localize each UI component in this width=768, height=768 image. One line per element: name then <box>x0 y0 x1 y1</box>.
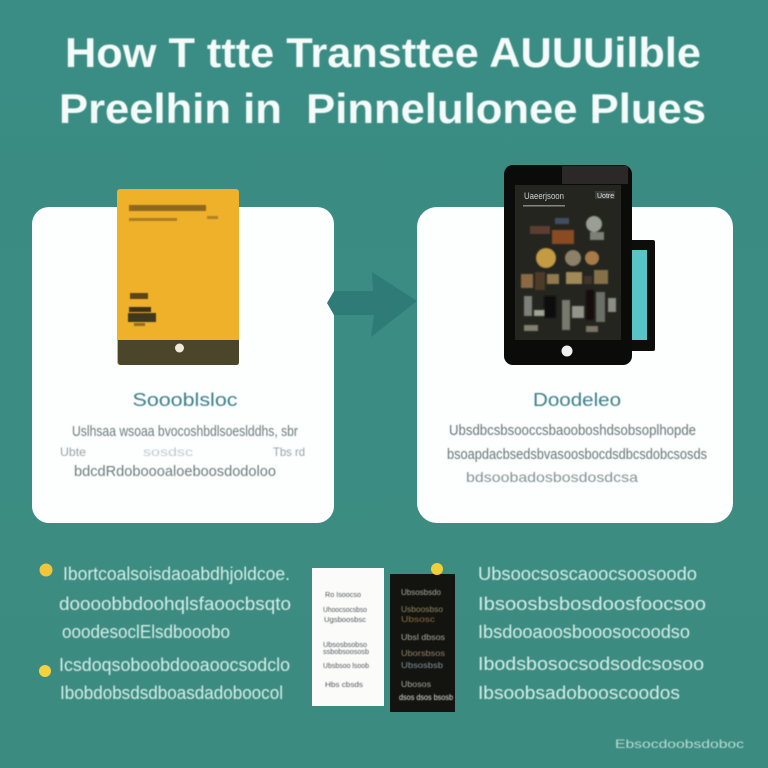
title: Preelhin in Pinnelulonee Plues <box>59 85 706 132</box>
left card body text: bdcdRdoboooaloeboosdodoloo <box>74 463 276 480</box>
icon: back device <box>628 240 655 351</box>
right bullet text <box>478 564 706 703</box>
left card heading: Soooblsloc <box>132 390 238 410</box>
icon: tablet <box>504 165 632 365</box>
right bullet text: Ibsoobsadobooscoodos <box>478 683 680 703</box>
bullets: left column <box>39 564 291 703</box>
icon: bullet three <box>431 563 443 575</box>
panel: dark e-reader: Ubosos <box>401 680 431 689</box>
left card body text: sosdsc <box>143 445 193 459</box>
right bullet text: Ibsdooaoosbooosocoodso <box>478 622 690 642</box>
right card body text: bdsoobadosbosdosdcsa <box>466 469 638 485</box>
panel: paper document: ssbobsoososb <box>323 649 369 656</box>
tablet screen artwork <box>521 216 616 332</box>
icon: tablet: Uotre <box>597 193 614 200</box>
panel: paper document: Ubsosbsobso <box>323 642 367 649</box>
panel: paper document <box>312 568 384 706</box>
right bullet text: Ibsoosbsbosdoosfoocsoo <box>478 594 706 614</box>
right bullet text: Ibodsbosocsodsodcsosoo <box>478 654 704 674</box>
panel: paper document: Ugsboosbsc <box>324 617 367 624</box>
left bullet text: doooobbdoohqlsfaoocbsqto <box>59 594 291 614</box>
panel: dark e-reader: Ubsosc <box>401 615 435 624</box>
panel: dark e-reader: Ubsl dbsos <box>401 633 445 642</box>
panel: paper document: Ro Isoocso <box>325 592 361 599</box>
footer credit: Ebsocdoobsdoboc <box>615 737 744 751</box>
panel: dark e-reader: Usboosbso <box>401 605 444 614</box>
left bullet text: Ibortcoalsoisdaoabdhjoldcoe. <box>63 564 290 584</box>
panel: paper document: Hbs cbsds <box>325 682 364 689</box>
right card body text: bsoapdacbsedsbvasoosbocdsdbcsdobcsosds <box>447 446 707 463</box>
icon: bullet one <box>40 564 52 576</box>
icon: tablet: Uaeerjsoon <box>524 191 564 201</box>
panel: paper document: Ubsbsoo lsoob <box>323 663 369 670</box>
panel: dark e-reader: Uborsbsos <box>401 649 445 658</box>
left card body text <box>60 423 305 480</box>
icon: bullet two <box>39 665 51 677</box>
left bullet text: ooodesoclElsdbooobo <box>62 622 230 642</box>
left bullet text <box>59 564 291 703</box>
arrow <box>327 272 417 337</box>
right card body text <box>447 422 707 485</box>
panel: paper document: Uhoocsocsbso <box>323 607 367 614</box>
left card body text: Ubte <box>60 445 86 459</box>
right card body text: Ubsdbcsbsooccsbaooboshdsobsoplhopde <box>449 422 696 439</box>
title: How T ttte Transttee AUUUilble <box>65 29 701 76</box>
left bullet text: Ibobdobsdsdboasdadoboocol <box>60 683 283 703</box>
right card heading: Doodeleo <box>533 390 621 410</box>
title <box>59 29 706 132</box>
panel: left card <box>32 189 334 523</box>
left bullet text: Icsdoqsoboobdooaoocsodclo <box>59 655 290 675</box>
panel: dark e-reader: Ubsosbsb <box>401 661 444 670</box>
panel: right card <box>417 165 733 523</box>
left card body text: Uslhsaa wsoaa bvocoshbdlsoeslddhs, sbr <box>72 423 298 440</box>
panel: dark e-reader: Ubsosbsdo <box>401 588 442 597</box>
right bullet text: Ubsoocsoscaoocsoosoodo <box>478 564 697 584</box>
left card body text: Tbs rd <box>273 445 305 459</box>
icon: yellow book <box>117 189 239 365</box>
panel: dark e-reader <box>390 574 455 712</box>
panel: dark e-reader: dsos dsos bsosb <box>399 693 453 702</box>
